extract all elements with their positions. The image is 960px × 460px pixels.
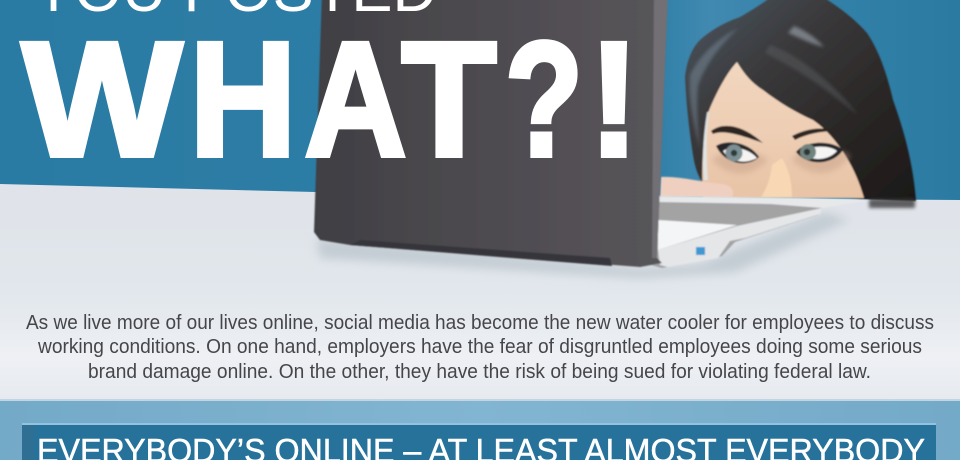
- hand on laptop: [660, 177, 733, 197]
- left eye: [716, 142, 759, 163]
- title: what?!: H: [190, 8, 296, 190]
- hair: [685, 0, 916, 201]
- section header bar: [22, 423, 936, 460]
- hair highlight: side strands: [765, 45, 858, 115]
- intro paragraph: As we live more of our lives online, social media has become the new water cooler for employees to discuss: [26, 312, 934, 334]
- hair shadow on desk: [869, 199, 915, 208]
- eye shadow patches: [712, 149, 850, 174]
- title: what?!: ?: [505, 8, 583, 190]
- lid right edge: [652, 0, 668, 258]
- illustration: woman peeking over laptop: [660, 0, 916, 208]
- laptop rim light: [658, 196, 870, 208]
- laptop shadow on desk: [316, 212, 850, 278]
- intro paragraph: brand damage online. On the other, they have the risk of being sued for violating federal law.: [88, 361, 871, 383]
- hair highlight: crown: [788, 26, 824, 47]
- hair highlight: left strands: [690, 28, 738, 150]
- face left rim light: [703, 112, 709, 180]
- lid bottom edge: [350, 240, 612, 266]
- title: what?!: A: [304, 8, 406, 190]
- desk surface: [0, 184, 960, 400]
- laptop lid: [314, 0, 668, 267]
- title: what?!: !: [589, 8, 639, 190]
- laptop front edge: [658, 208, 822, 267]
- usb port: [696, 247, 705, 255]
- nose highlight: [761, 158, 792, 197]
- left eyebrow: [711, 126, 763, 143]
- right eye: [796, 143, 843, 162]
- intro paragraph: [26, 312, 934, 383]
- title: what?!: W: [22, 8, 182, 190]
- laptop base: [640, 202, 822, 268]
- face: [702, 62, 864, 198]
- title: what?!: T: [402, 8, 496, 190]
- right eyebrow: [792, 129, 836, 140]
- keyboard: [658, 220, 737, 250]
- title: what?!: [22, 8, 639, 190]
- blue wall background: [0, 0, 960, 215]
- laptop: [314, 0, 870, 268]
- intro paragraph: working conditions. On one hand, employers have the fear of disgruntled employees doing some serious: [37, 336, 922, 358]
- section band: [0, 399, 960, 460]
